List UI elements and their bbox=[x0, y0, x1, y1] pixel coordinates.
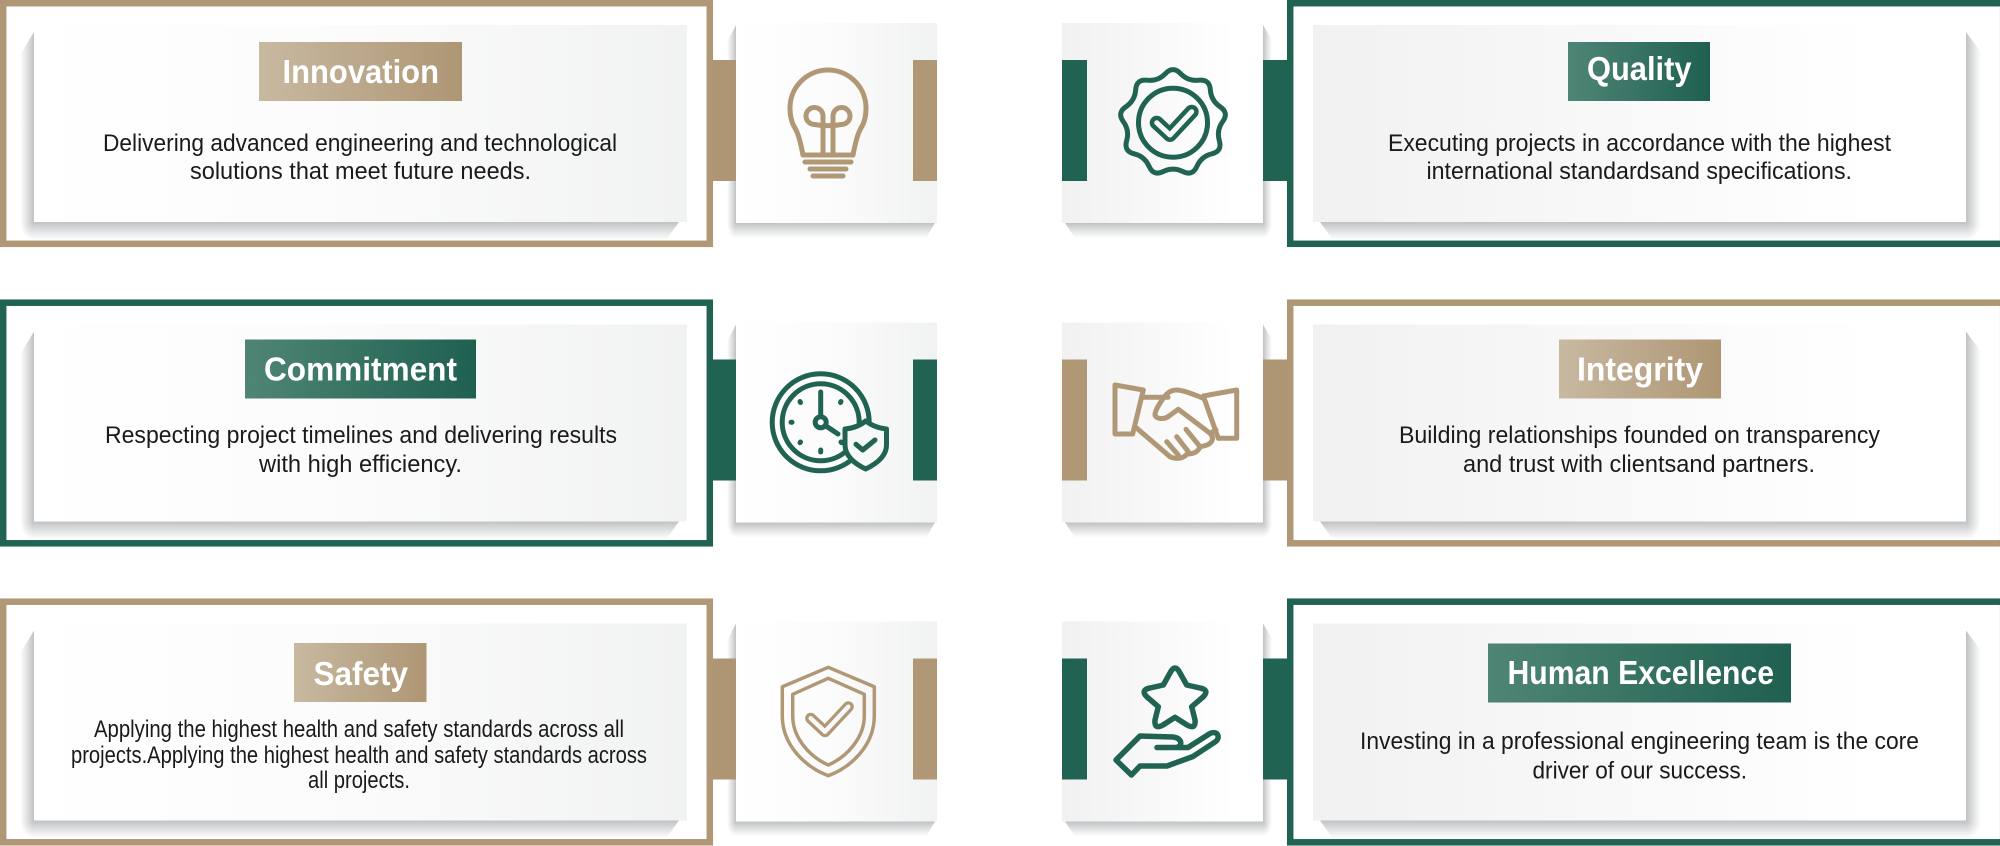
card shadow bbox=[1320, 32, 1981, 240]
icon tile: human excellence bbox=[1062, 622, 1287, 836]
frame bbox=[3, 303, 710, 543]
side bar bbox=[1062, 658, 1087, 780]
tile shadow bbox=[727, 25, 935, 238]
description bbox=[1388, 130, 1891, 185]
frame bbox=[1290, 3, 2000, 244]
description: all projects. bbox=[308, 767, 410, 794]
description: solutions that meet future needs. bbox=[190, 158, 531, 185]
description: driver of our success. bbox=[1532, 758, 1747, 784]
heading badge: Human Excellence bbox=[1508, 654, 1774, 691]
description: with high efficiency. bbox=[258, 451, 462, 478]
frame bbox=[3, 602, 710, 842]
card shadow bbox=[20, 32, 679, 240]
icon: light bulb bbox=[790, 70, 866, 176]
panel: human excellence bbox=[1290, 602, 2000, 842]
icon tile: commitment bbox=[713, 322, 937, 538]
card bbox=[1313, 624, 1966, 820]
card shadow bbox=[1320, 630, 1981, 838]
heading badge bbox=[294, 643, 426, 702]
icon tile: integrity bbox=[1062, 322, 1287, 538]
frame bbox=[1290, 303, 2000, 543]
heading badge bbox=[1559, 340, 1721, 398]
tile bbox=[1062, 322, 1263, 522]
panel: integrity bbox=[1290, 303, 2000, 543]
heading badge: Quality bbox=[1587, 50, 1692, 87]
card bbox=[34, 25, 687, 222]
description: Respecting project timelines and delivering results bbox=[105, 422, 617, 449]
side bar bbox=[1062, 60, 1087, 181]
icon: quality seal bbox=[1121, 70, 1225, 173]
panel: innovation bbox=[3, 3, 710, 244]
connector bbox=[1263, 658, 1287, 780]
icon: handshake bbox=[1115, 385, 1237, 458]
card shadow bbox=[1320, 332, 1981, 540]
description bbox=[105, 422, 617, 478]
heading badge bbox=[1488, 644, 1791, 702]
tile shadow bbox=[727, 624, 935, 836]
description: projects.Applying the highest health and safety standards across bbox=[71, 742, 647, 769]
icon tile: safety bbox=[713, 622, 937, 836]
tile bbox=[1062, 622, 1263, 822]
frame bbox=[1290, 602, 2000, 842]
description: Applying the highest health and safety standards across all bbox=[94, 716, 624, 743]
description: Investing in a professional engineering team is the core bbox=[1360, 728, 1919, 755]
frame bbox=[3, 3, 710, 244]
description: international standardsand specifications. bbox=[1426, 158, 1852, 185]
side bar bbox=[913, 60, 937, 181]
description bbox=[71, 716, 647, 794]
panel: commitment bbox=[3, 303, 710, 543]
heading badge bbox=[245, 340, 476, 398]
description: and trust with clientsand partners. bbox=[1463, 451, 1815, 478]
tile shadow bbox=[1065, 624, 1272, 836]
icon: shield with check bbox=[782, 667, 874, 776]
panel: quality bbox=[1290, 3, 2000, 244]
description: Executing projects in accordance with the highest bbox=[1388, 130, 1891, 157]
card bbox=[1313, 324, 1966, 522]
connector bbox=[713, 658, 737, 780]
heading badge: Innovation bbox=[282, 53, 439, 90]
description bbox=[1399, 422, 1880, 478]
card bbox=[34, 624, 687, 820]
icon: hand with star bbox=[1116, 668, 1218, 775]
heading badge: Safety bbox=[314, 655, 409, 692]
side bar bbox=[913, 360, 937, 480]
heading badge: Commitment bbox=[264, 350, 457, 388]
tile shadow bbox=[1065, 25, 1272, 238]
connector bbox=[1263, 60, 1287, 181]
tile bbox=[736, 622, 937, 822]
icon tile: quality bbox=[1062, 23, 1287, 238]
card shadow bbox=[20, 630, 679, 838]
tile shadow bbox=[1065, 324, 1272, 538]
description bbox=[1360, 728, 1919, 784]
card bbox=[1313, 25, 1966, 222]
description bbox=[103, 130, 617, 185]
tile bbox=[736, 322, 937, 522]
description: Delivering advanced engineering and technological bbox=[103, 130, 617, 157]
tile bbox=[736, 23, 937, 223]
heading badge: Integrity bbox=[1577, 350, 1704, 388]
heading badge bbox=[259, 42, 462, 101]
panel: safety bbox=[3, 602, 710, 842]
tile bbox=[1062, 23, 1263, 223]
side bar bbox=[913, 658, 937, 780]
connector bbox=[713, 60, 737, 181]
card shadow bbox=[20, 332, 679, 540]
tile shadow bbox=[727, 324, 935, 538]
connector bbox=[713, 360, 737, 480]
connector bbox=[1263, 360, 1287, 480]
card bbox=[34, 324, 687, 522]
icon tile: innovation bbox=[713, 23, 937, 238]
description: Building relationships founded on transparency bbox=[1399, 422, 1880, 449]
heading badge bbox=[1568, 42, 1710, 101]
side bar bbox=[1062, 360, 1087, 480]
icon: clock with shield bbox=[772, 374, 886, 471]
